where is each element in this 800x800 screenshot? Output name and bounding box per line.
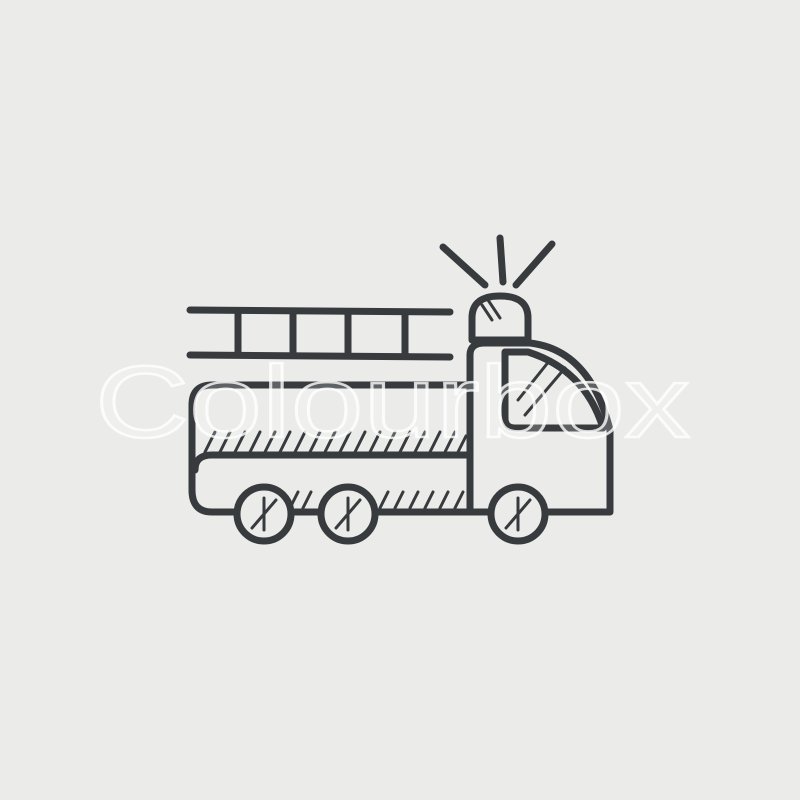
cab <box>470 343 610 512</box>
ladder <box>190 310 450 357</box>
siren light with rays <box>443 238 552 340</box>
truck body <box>192 385 470 512</box>
wheels <box>237 487 545 541</box>
icon: fire truck <box>190 238 610 541</box>
watermark text: Colourbox <box>95 345 690 459</box>
